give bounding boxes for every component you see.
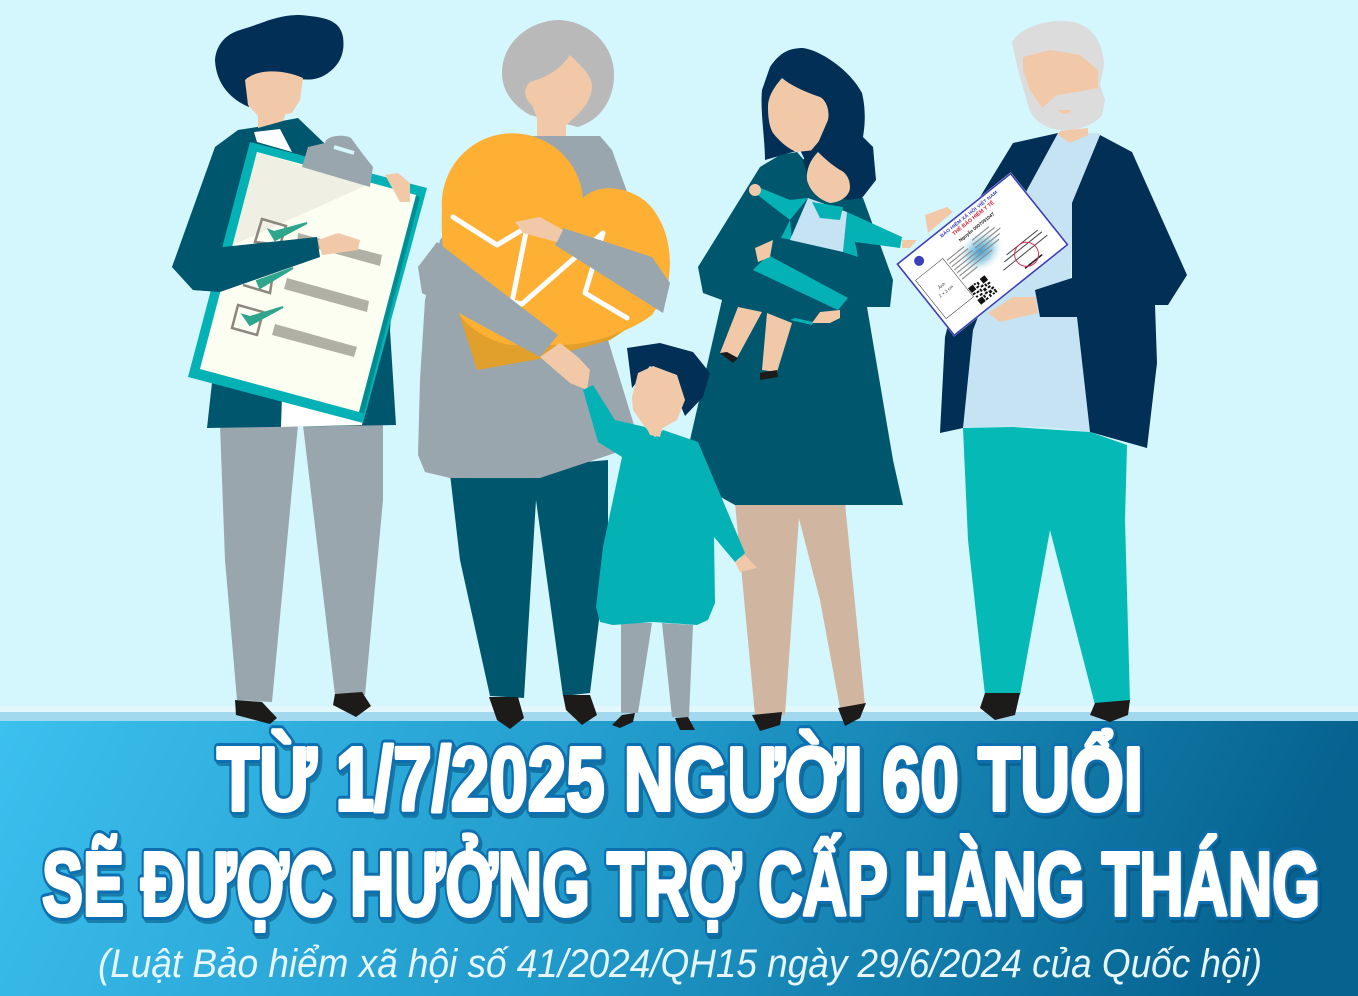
baby hair — [803, 138, 876, 200]
grandfather shirt — [963, 133, 1100, 432]
card QR code — [968, 275, 998, 305]
mother hands — [755, 240, 840, 323]
man lower hand — [318, 233, 360, 255]
card heading: BẢO HIỂM XÃ HỘI VIỆT NAM — [938, 188, 999, 239]
check 3 — [243, 307, 283, 325]
baby — [720, 138, 917, 380]
heart body — [442, 133, 670, 345]
grandfather neck — [1058, 128, 1088, 143]
grandmother left arm — [418, 242, 558, 357]
card details — [947, 222, 1010, 279]
card stamp — [1010, 237, 1043, 271]
clipboard shadow edge — [359, 196, 420, 413]
clip hole — [334, 147, 354, 153]
figure: mother holding baby — [690, 48, 917, 731]
grandmother face — [525, 55, 592, 140]
mother face — [768, 78, 829, 152]
child trousers — [621, 623, 693, 717]
baby collar — [812, 202, 843, 220]
child head — [632, 366, 685, 428]
grandfather face — [1023, 50, 1098, 108]
grandfather shoes — [980, 693, 1130, 722]
grandmother upper hand — [515, 217, 563, 242]
mother dress — [690, 152, 903, 505]
baby trousers — [753, 255, 848, 325]
man arm — [172, 200, 320, 292]
grandfather lower hand — [988, 297, 1038, 322]
child shoes — [612, 713, 695, 730]
grandmother shoes — [489, 695, 597, 729]
man shoes — [235, 692, 371, 724]
baby shoes — [720, 352, 778, 380]
grandfather mouth — [1058, 110, 1072, 114]
man jacket — [172, 118, 400, 428]
card number: Nguyễn 0907091047 — [957, 210, 996, 243]
heart — [442, 133, 670, 370]
heart underside — [458, 310, 653, 370]
baby head — [807, 152, 850, 203]
grandmother trousers — [450, 460, 608, 698]
grandmother right arm — [555, 228, 670, 313]
figure: grandfather with card — [896, 21, 1187, 722]
card photo box: 2 × 3 cm — [938, 284, 954, 299]
grandfather jacket left — [940, 133, 1058, 433]
child neck — [645, 425, 663, 437]
checkbox 2 — [243, 280, 272, 293]
card photo box — [916, 259, 973, 319]
grandmother dress — [418, 136, 634, 478]
man shirt — [254, 129, 364, 427]
baby left arm — [755, 187, 808, 220]
baby bib — [790, 198, 847, 252]
grandfather hair and beard — [1012, 21, 1105, 130]
card photo box: Ảnh — [937, 281, 947, 290]
baby right hand — [902, 240, 917, 248]
baby left hand — [749, 184, 761, 196]
subtitle: legal reference: (Luật Bảo hiểm xã hội số 41/2024/QH15 ngày 29/6/2024 của Quốc hội) — [98, 942, 1262, 986]
check 2 — [257, 268, 293, 288]
heart pulse line — [453, 217, 627, 318]
figure: child — [583, 343, 757, 730]
man trousers — [220, 425, 383, 702]
card watermark — [948, 219, 1013, 283]
checkbox 3 — [232, 305, 263, 335]
clipboard frame — [188, 142, 427, 423]
mother hair — [762, 48, 875, 197]
mother shoes — [752, 703, 866, 731]
card title: THẺ BẢO HIỂM Y TẾ — [951, 199, 996, 237]
list bars — [272, 233, 382, 357]
grandmother hair — [502, 20, 614, 127]
main title — [42, 728, 1322, 938]
card signature text — [997, 227, 1047, 270]
card logo — [912, 254, 926, 268]
bottom title band — [0, 706, 1358, 996]
grandfather jacket right — [1035, 135, 1187, 448]
baby right arm and shirt — [781, 212, 902, 257]
figure: grandmother with heart — [418, 20, 670, 729]
grandfather trousers — [963, 427, 1130, 705]
clipboard — [188, 136, 427, 423]
grandfather upper hand — [925, 207, 953, 233]
child hair — [627, 343, 710, 416]
figure: man with clipboard — [172, 15, 427, 724]
baby legs — [720, 307, 792, 372]
child shirt — [583, 385, 745, 625]
paper shade — [233, 152, 367, 245]
clipboard paper — [200, 152, 416, 412]
child hand — [735, 555, 757, 572]
grandmother lower hand — [540, 343, 590, 390]
health insurance card — [896, 172, 1069, 337]
clipboard clip — [302, 136, 373, 187]
man neck — [258, 100, 290, 128]
man hair — [215, 15, 343, 107]
mother legs — [735, 503, 865, 715]
check 1 — [269, 223, 307, 240]
checkbox 1 — [255, 219, 286, 245]
man upper hand — [385, 173, 410, 202]
man face — [245, 71, 303, 118]
